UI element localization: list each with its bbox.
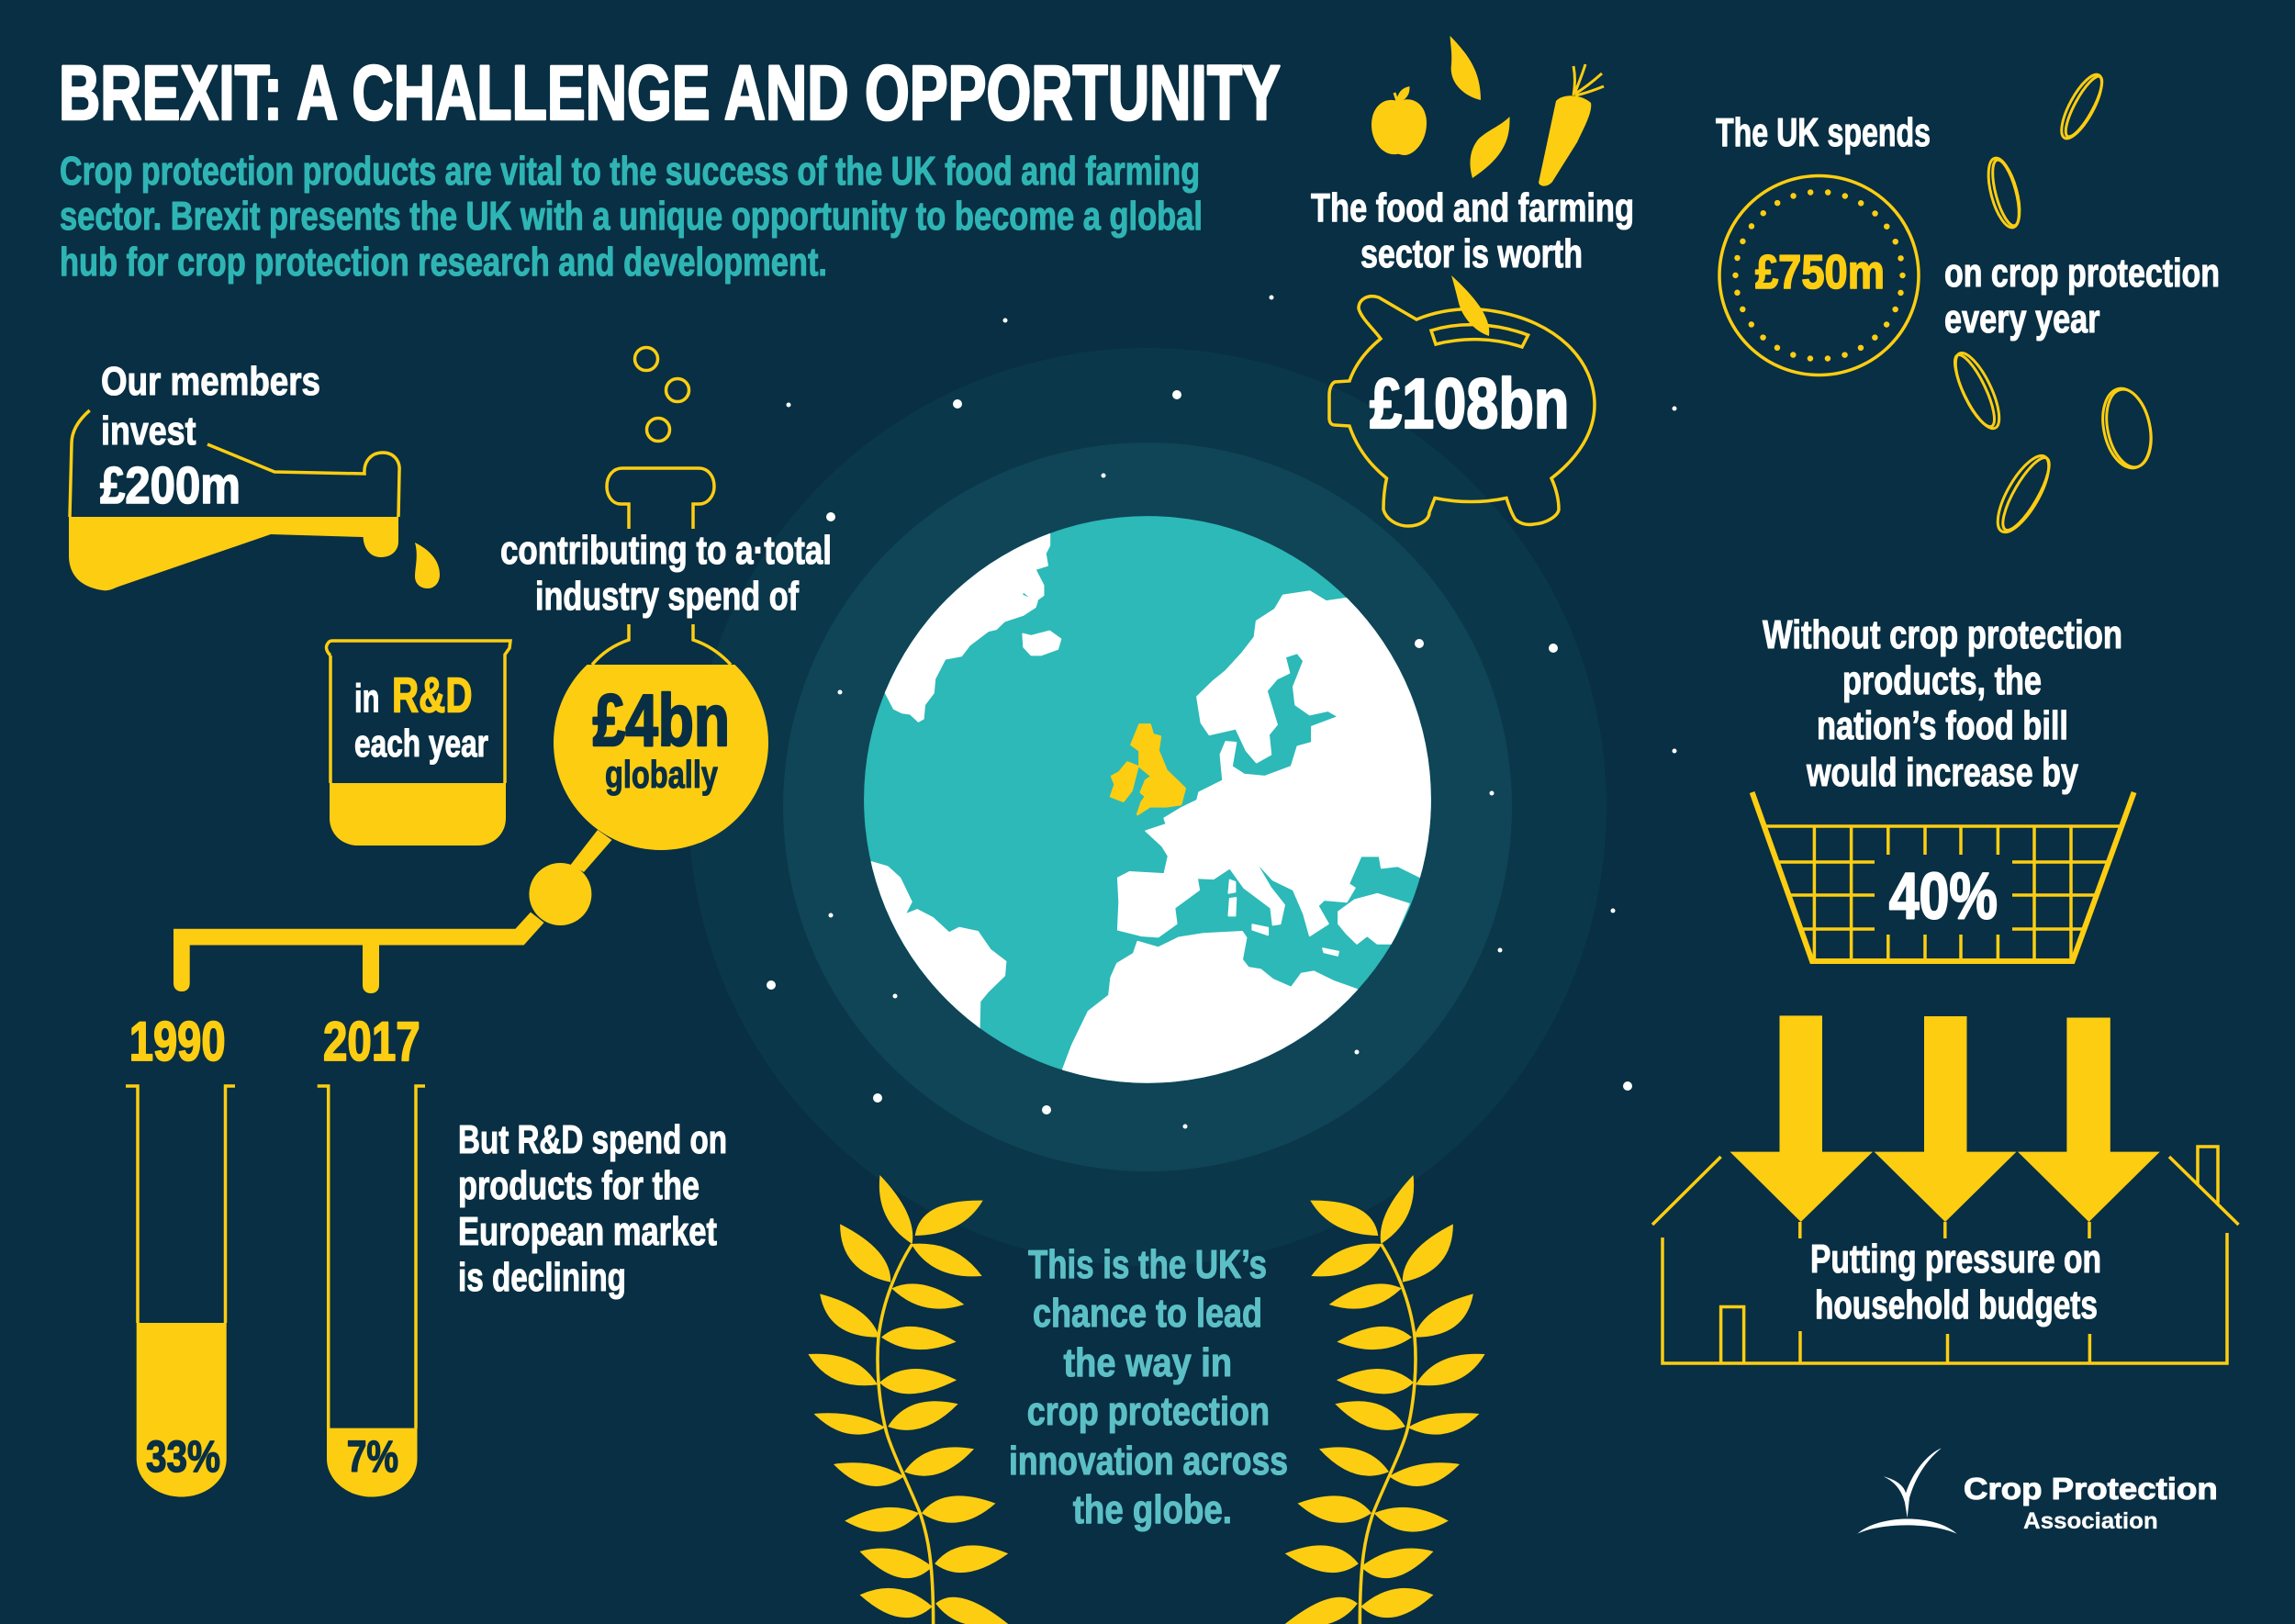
round flask with £4bn: industry spend of — [535, 574, 799, 619]
test tube 1990: 33% — [126, 1011, 235, 1496]
declining R&D text: products for the — [458, 1163, 700, 1208]
left wheat wreath — [808, 1175, 1008, 1624]
on crop protection text: every year — [1944, 297, 2100, 342]
food bill text: products, the — [1842, 658, 2042, 703]
Crop Protection Association logo: Crop Protection — [1964, 1472, 2218, 1506]
food and farming text: The food and farming — [1311, 185, 1634, 230]
pouring flask with £200m: Our members — [101, 359, 320, 404]
pouring flask with £200m — [69, 359, 440, 590]
UK and Ireland highlight — [1111, 724, 1185, 814]
globe map — [864, 516, 1431, 1083]
right wheat wreath — [1285, 1175, 1485, 1624]
closing statement: crop protection — [1027, 1389, 1270, 1434]
beaker: in R&D each year: in — [354, 676, 380, 722]
food and farming text — [1311, 185, 1634, 276]
shopping basket with 40%: 40% — [1889, 861, 1998, 934]
on crop protection text: on crop protection — [1944, 251, 2220, 296]
Crop Protection Association logo — [1857, 1448, 2218, 1534]
closing statement: chance to lead — [1033, 1291, 1262, 1336]
intro paragraph — [60, 149, 1203, 285]
intro paragraph: hub for crop protection research and development. — [60, 240, 827, 285]
coin with £750m: £750m — [1755, 246, 1885, 299]
test tube 2017: 7% — [318, 1011, 425, 1496]
round flask with £4bn: £4bn — [593, 679, 730, 761]
bubbles — [635, 347, 688, 441]
intro paragraph: Crop protection products are vital to the success of the UK food and farming — [60, 149, 1200, 194]
test tube 2017: 7%: 7% — [347, 1433, 398, 1482]
stars — [767, 296, 1676, 1129]
round flask with £4bn — [500, 468, 832, 850]
on crop protection text — [1944, 251, 2220, 342]
three pressure arrows — [1730, 1015, 2160, 1222]
test tube 2017: 7%: 2017 — [323, 1011, 420, 1072]
house outline: Putting pressure on — [1810, 1237, 2101, 1282]
declining R&D text: But R&D spend on — [458, 1117, 727, 1162]
shopping basket with 40% — [1752, 792, 2134, 961]
food bill text — [1763, 612, 2122, 795]
food bill text: would increase by — [1806, 750, 2078, 795]
food and farming text: sector is worth — [1360, 231, 1583, 276]
closing statement: This is the UK’s — [1028, 1242, 1267, 1287]
beaker: in R&D each year: each year — [354, 722, 488, 765]
beaker: in R&D each year — [327, 641, 510, 846]
food bill text: nation’s food bill — [1817, 703, 2068, 748]
closing statement: innovation across — [1009, 1439, 1288, 1484]
UK spends text: The UK spends — [1716, 110, 1931, 155]
test tube 1990: 33%: 1990 — [129, 1011, 226, 1072]
closing statement: the globe. — [1073, 1487, 1232, 1532]
closing statement: the way in — [1063, 1340, 1232, 1385]
piggy bank with £108bn — [1329, 275, 1595, 526]
house outline — [1652, 1147, 2238, 1363]
Crop Protection Association logo: Association — [2023, 1508, 2158, 1534]
food icons: apple, leaves, carrot — [1371, 36, 1604, 186]
connecting pipe — [174, 830, 611, 993]
beaker: in R&D each year: R&D — [392, 668, 472, 723]
declining R&D text — [458, 1117, 727, 1300]
title: BREXIT: A CHALLENGE AND OPPORTUNITY — [59, 50, 1281, 136]
declining R&D text: European market — [458, 1209, 717, 1254]
declining R&D text: is declining — [458, 1255, 626, 1300]
round flask with £4bn: globally — [605, 753, 718, 796]
pouring flask with £200m: invest — [101, 409, 196, 454]
intro paragraph: sector. Brexit presents the UK with a unique opportunity to become a global — [60, 194, 1203, 239]
round flask with £4bn: contributing to a·total — [500, 528, 832, 573]
test tube 1990: 33%: 33% — [146, 1433, 220, 1482]
food bill text: Without crop protection — [1763, 612, 2122, 657]
falling coins — [1947, 70, 2157, 539]
pouring flask with £200m: £200m — [100, 456, 241, 515]
globe halo rings — [688, 348, 1606, 1266]
coin with £750m — [1719, 176, 1919, 375]
piggy bank with £108bn: £108bn — [1370, 364, 1569, 443]
closing statement — [1009, 1242, 1288, 1532]
house outline: household budgets — [1815, 1282, 2098, 1327]
